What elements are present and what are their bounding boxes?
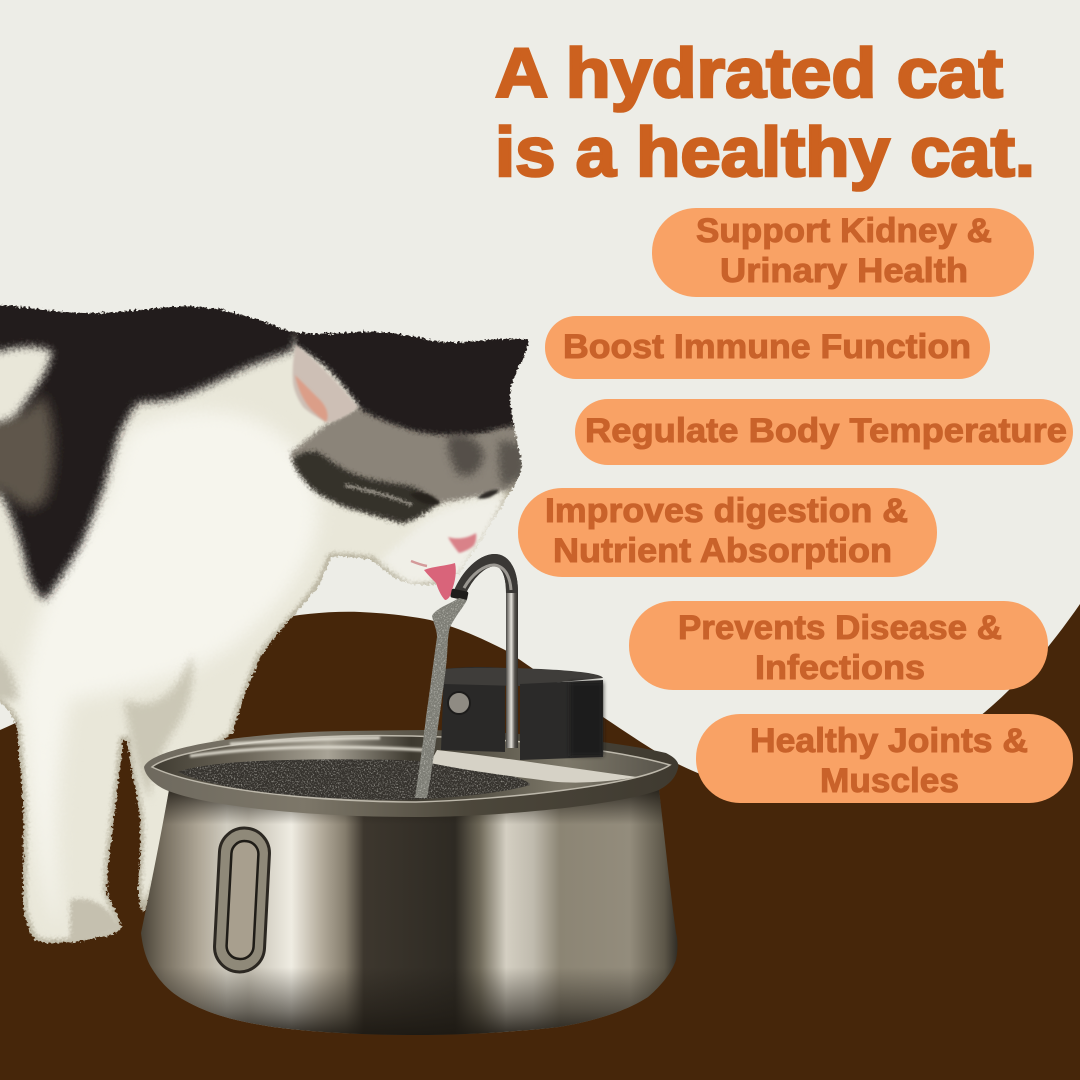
cat face grey fur [290,405,530,523]
illustration: cat drinking [0,304,529,944]
benefit pill: disease [629,601,1048,690]
benefit pill: disease: Infections [755,649,925,687]
benefit pill: temperature: Regulate Body Temperature [585,412,1067,450]
cat closed eyes [410,490,499,505]
bowl divider strip [430,750,637,783]
fountain pump box left [441,667,505,752]
benefit pill: immune: Boost Immune Function [563,328,971,366]
fountain box top [444,668,603,686]
bowl body shading [141,790,678,1035]
benefit pill: joints [696,714,1073,803]
fountain button [448,692,470,714]
cat belly highlight [20,411,318,930]
cat cheek right mark [498,440,525,487]
cat mouth lip [411,561,427,566]
water level window [213,827,271,973]
benefit pill: joints: Healthy Joints & [750,722,1028,760]
cat shoulder white patch [0,347,52,424]
cat nose [448,533,476,553]
cat fold shadow [124,655,193,800]
cat forehead mark [448,435,484,476]
illustration: steel fountain [141,560,678,1035]
cat head dark fur [292,330,529,439]
benefit pill: temperature [575,399,1073,465]
title: A hydrated cat [495,34,1003,112]
water stream sparkle [415,598,467,798]
cat fur body and markings [0,304,529,944]
cat flank grey streaks [0,395,54,508]
cat back dark patch [0,290,310,600]
cat paw shading [70,899,122,945]
fountain box right shade [570,682,603,756]
cat fur edge shading [0,304,529,943]
bowl inner highlight [190,738,425,756]
bowl water ripple [178,759,530,800]
benefit pill: kidney: Urinary Health [720,252,968,290]
benefit pill: digestion: Improves digestion & [545,492,908,530]
benefit pill: digestion [518,488,937,577]
cat left flank shadow [0,640,18,700]
fountain spout curve highlight [464,565,511,590]
cat white fur base [0,344,504,944]
benefit pill: kidney [652,208,1034,297]
cat muzzle white [380,497,505,585]
benefit pill: disease: Prevents Disease & [678,609,1002,647]
title [495,34,1035,191]
fountain spout [459,560,512,748]
fountain spout curve top [459,560,512,594]
cat cheek stripe highlight [345,485,412,505]
title: is a healthy cat. [495,113,1035,191]
benefit pill: joints: Muscles [820,762,959,800]
bowl rim inner surface [152,736,670,802]
benefit pill: digestion: Nutrient Absorption [553,532,892,570]
benefit pill: kidney: Support Kidney & [696,212,992,250]
bowl water [178,759,530,800]
cat cheek stripe [293,452,438,523]
cat ear [293,345,358,423]
benefit pill: immune [545,316,990,379]
fountain pump box right [520,680,603,760]
bowl body [141,790,678,1035]
water stream [415,598,467,798]
bowl rim lip [144,730,678,817]
fountain nozzle [450,588,469,601]
cat tongue [424,563,456,600]
brown wave background shape [0,604,1080,1080]
